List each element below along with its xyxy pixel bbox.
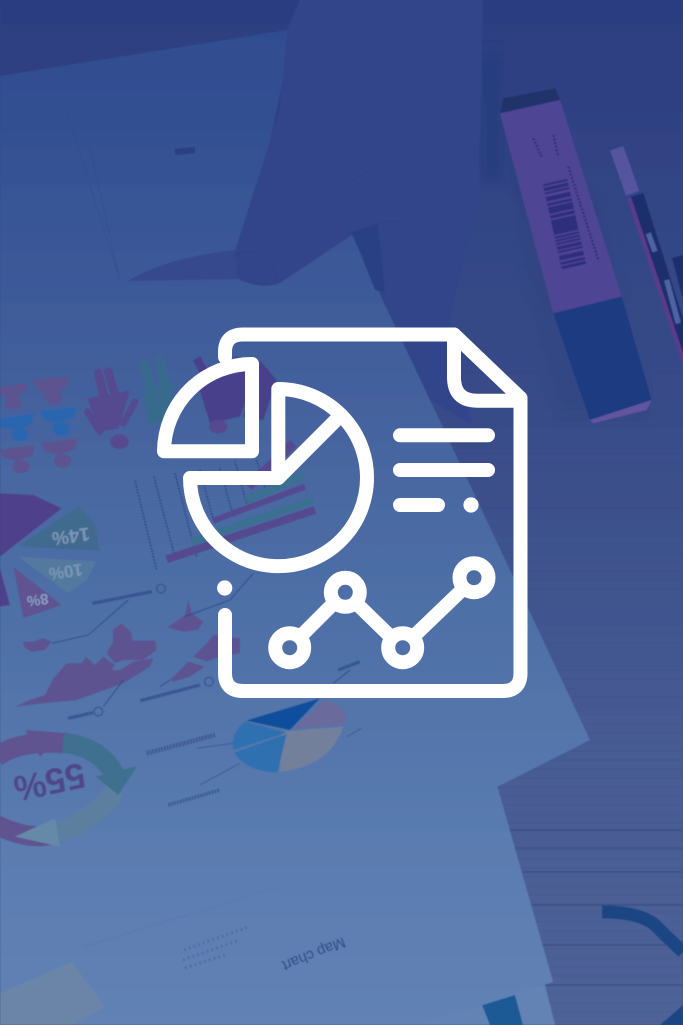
folded corner	[454, 334, 520, 401]
small people pictograms	[0, 376, 78, 473]
outline gap dot	[217, 580, 232, 596]
ribbon	[602, 912, 683, 952]
fold lines on upper sheet	[67, 113, 120, 280]
pencil	[617, 148, 683, 370]
middle paper sheet	[0, 778, 553, 1025]
shadow beside hand	[483, 50, 501, 180]
pie chart main body	[190, 415, 367, 566]
second marker in corner	[672, 255, 683, 300]
blue chart block on lowest sheet	[482, 995, 523, 1025]
map chart text: Map chart	[279, 933, 348, 974]
donut arrow chart	[0, 730, 137, 847]
icon: report document	[164, 334, 520, 691]
line chart connector	[300, 588, 464, 638]
main paper sheet	[0, 230, 590, 960]
second pie chart	[147, 698, 362, 805]
bar chart	[135, 443, 315, 570]
large people pictograms	[87, 358, 277, 449]
label: 14%: 14%	[50, 522, 91, 549]
highlighter shadow	[500, 130, 650, 420]
world map	[15, 600, 240, 707]
pie chart slices	[0, 493, 99, 618]
document outline with folded corner	[225, 334, 520, 691]
small text on upper sheet	[175, 147, 195, 155]
finger under the sheet	[128, 250, 238, 281]
label: 55%: 55%	[10, 755, 89, 810]
map leader lines and labels	[52, 573, 360, 718]
text lines	[400, 435, 488, 505]
lowest paper sheet	[300, 985, 555, 1025]
printed charts on main sheet	[0, 358, 362, 847]
crease across lower sheets	[83, 880, 300, 947]
sticky note corner	[0, 962, 105, 1025]
ribbon end	[660, 1005, 683, 1025]
thumb nail and knuckle crease	[233, 165, 400, 284]
highlighter pen	[500, 88, 652, 423]
text line dot	[463, 497, 479, 513]
upper paper sheet	[0, 30, 287, 340]
label: 8%: 8%	[26, 590, 50, 609]
dotted map on lower sheet	[183, 927, 248, 968]
pie chart wedge	[278, 389, 341, 478]
label: 10%: 10%	[48, 560, 84, 583]
shadow between thumb and hand	[352, 224, 385, 292]
line chart nodes	[275, 563, 488, 662]
detached pie slice	[164, 364, 252, 451]
hand holding the sheet	[232, 0, 483, 425]
